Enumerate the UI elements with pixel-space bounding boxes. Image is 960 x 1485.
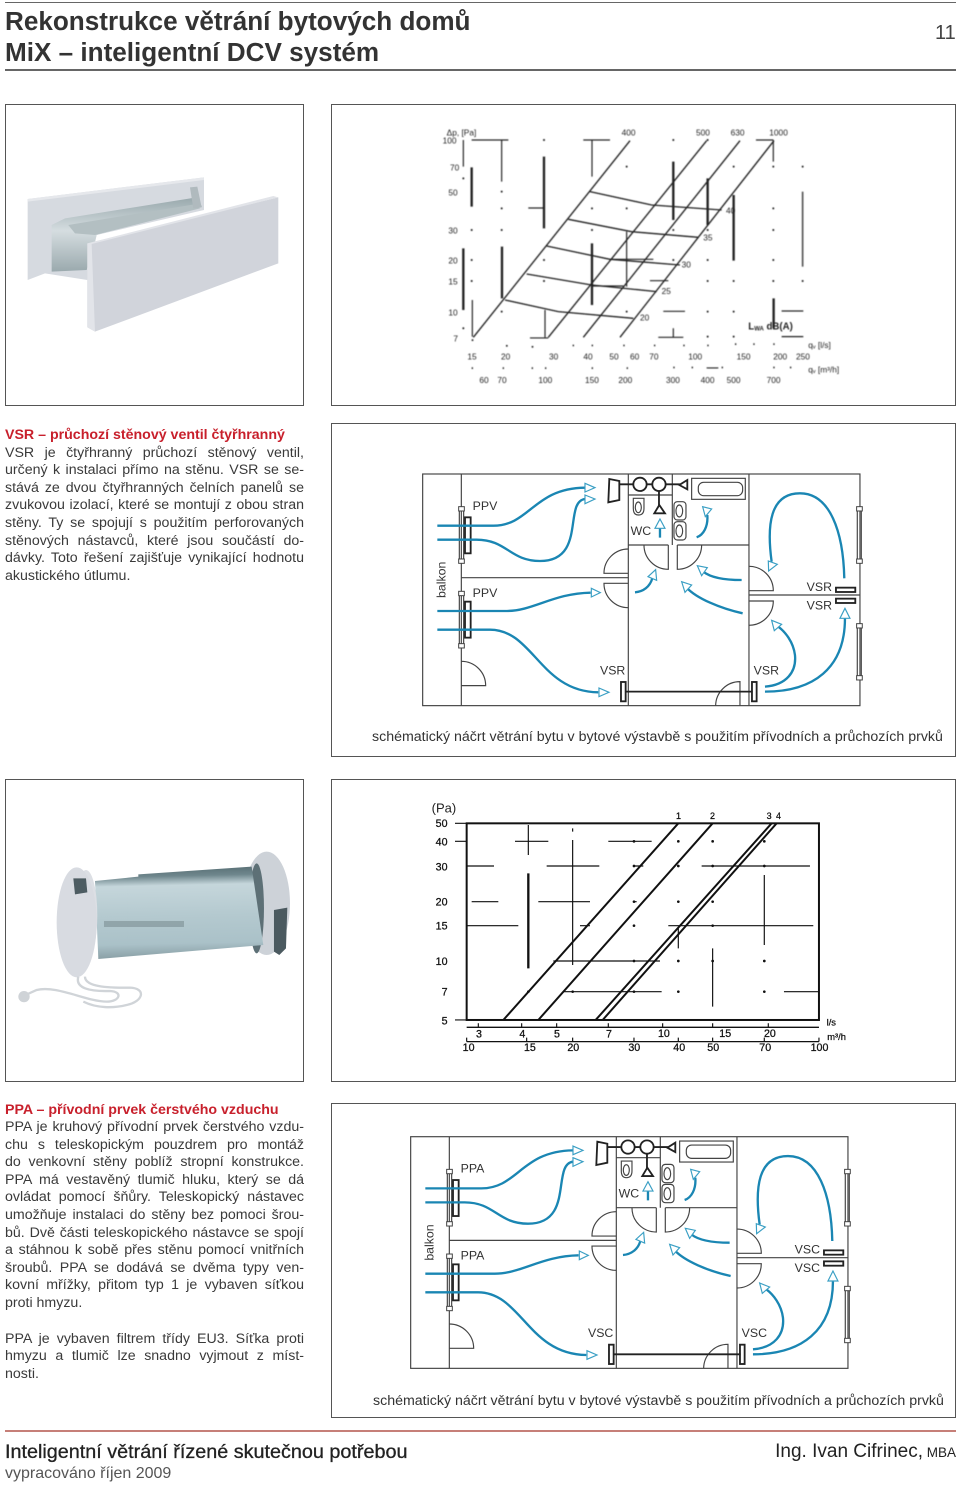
chart: VSR pressure and noise diagram: 30 — [448, 225, 458, 235]
chart: VSR pressure and noise diagram: 70 — [649, 352, 659, 362]
text block: PPA description: bů. Dvě části teleskopického nástavce se spojí — [5, 1225, 304, 1241]
chart: VSR pressure and noise diagram: Δp, [Pa] — [447, 127, 476, 137]
chart: PPA pressure loss diagram: 15 — [719, 1028, 731, 1040]
chart: PPA pressure loss diagram: 5 — [442, 1015, 448, 1027]
chart: PPA pressure loss diagram: 10 — [436, 956, 448, 968]
chart: VSR pressure and noise diagram: 15 — [448, 277, 458, 287]
chart: VSR pressure and noise diagram: 30 — [549, 352, 559, 362]
chart: VSR pressure and noise diagram: 150 — [737, 352, 751, 362]
chart: VSR pressure and noise diagram: 40 — [726, 205, 736, 215]
chart: VSR pressure and noise diagram: 700 — [767, 375, 781, 385]
caption: VSR schematic: schématický náčrt větrání bytu v bytové výstavbě s použitím přívodních a průchozích prvků — [372, 729, 943, 745]
chart: VSR pressure and noise diagram: L — [748, 321, 754, 332]
title — [5, 6, 470, 67]
chart: PPA pressure loss diagram: 20 — [764, 1028, 776, 1040]
panel: PPA pressure chart — [331, 779, 956, 1082]
chart: VSR pressure and noise diagram: 20 — [501, 352, 511, 362]
text block: PPA description: ovládat pomocí šňůry. Teleskopický nástavec — [5, 1189, 304, 1205]
text block: VSR description — [5, 427, 304, 584]
text block: PPA description: PPA má vestavěný tlumič hluku, který se dá — [5, 1172, 304, 1188]
diagram: apartment floor plan with PPV and VSR: PPV — [473, 499, 498, 513]
text block: VSR description: stává ze dvou čtyřhranných čelních panelů se — [5, 480, 304, 496]
chart: VSR pressure and noise diagram: 300 — [666, 375, 680, 385]
chart: VSR pressure and noise diagram: 40 — [583, 352, 593, 362]
chart: PPA pressure loss diagram: 7 — [606, 1029, 612, 1041]
text block: PPA filter note: PPA je vybaven filtrem třídy EU3. Síťka proti — [5, 1330, 304, 1346]
icon: PPA cylindrical inlet — [18, 851, 289, 1007]
chart: PPA pressure loss diagram: 40 — [673, 1042, 685, 1054]
chart: VSR pressure and noise diagram: 60 — [630, 352, 640, 362]
chart: PPA pressure loss diagram: 20 — [436, 896, 448, 908]
panel: VSR pressure chart — [331, 104, 956, 406]
chart: VSR pressure and noise diagram: 100 — [443, 136, 457, 146]
diagram: apartment floor plan with PPA and VSC: VSC — [795, 1261, 820, 1275]
chart: PPA pressure loss diagram: 3 — [476, 1029, 482, 1041]
chart: PPA pressure loss diagram: 10 — [658, 1028, 670, 1040]
footer author: Ing. Ivan Cifrinec, MBA — [775, 1441, 956, 1462]
chart: PPA pressure loss diagram: 30 — [436, 861, 448, 873]
diagram: apartment floor plan with PPA and VSC: PPA — [461, 1249, 485, 1263]
chart: PPA pressure loss diagram: 50 — [707, 1042, 719, 1054]
text block: PPA filter note: nosti. — [5, 1366, 39, 1382]
arrow: airflow paths — [437, 488, 845, 692]
panel: PPA ventilation schematic — [331, 1103, 956, 1418]
diagram: apartment floor plan with PPV and VSR: WC — [631, 524, 651, 538]
chart: PPA pressure loss diagram: 100 — [811, 1042, 828, 1054]
title: MiX – inteligentní DCV systém — [5, 37, 379, 67]
chart: VSR pressure and noise diagram: 500 — [727, 375, 741, 385]
text block: PPA description: proti hmyzu. — [5, 1295, 82, 1311]
chart: PPA pressure loss diagram: 4 — [776, 811, 781, 821]
footer date: vypracováno říjen 2009 — [5, 1465, 171, 1482]
panel: VSR ventilation schematic — [331, 423, 956, 757]
chart: VSR pressure and noise diagram: 400 — [622, 127, 636, 137]
chart: VSR pressure and noise diagram: 35 — [703, 233, 713, 243]
chart: PPA pressure loss diagram: 7 — [442, 987, 448, 999]
text block: VSR description: akustického útlumu. — [5, 568, 130, 584]
chart: VSR pressure and noise diagram: 100 — [688, 352, 703, 362]
panel: VSR product photo — [5, 104, 304, 406]
text block: VSR description: stěnových nástavců, které jsou součástí do- — [5, 533, 304, 549]
arrow: airflow paths — [425, 1150, 833, 1355]
diagram: apartment floor plan with PPV and VSR: PPV — [473, 586, 498, 600]
chart: PPA pressure loss diagram: 1 — [676, 811, 681, 821]
chart: VSR pressure and noise diagram: 7 — [453, 333, 458, 343]
chart: PPA pressure loss diagram: 15 — [524, 1042, 536, 1054]
text block: PPA description: chu s teleskopickým pouzdrem pro montáž — [5, 1137, 304, 1153]
text block: PPA description: do venkovní stěny poblíž stropní konstrukce. — [5, 1154, 304, 1170]
diagram: apartment floor plan with PPV and VSR: VSR — [807, 598, 832, 612]
diagram: apartment floor plan with PPA and VSC: VSC — [588, 1326, 613, 1340]
chart: PPA pressure loss diagram: 30 — [628, 1042, 640, 1054]
chart: VSR pressure and noise diagram: 400 — [701, 375, 715, 385]
chart: PPA pressure loss diagram: 40 — [436, 836, 448, 848]
chart: PPA pressure loss diagram: 5 — [554, 1029, 560, 1041]
caption: PPA schematic: schématický náčrt větrání bytu v bytové výstavbě s použitím přívodních a průchozích prvků — [373, 1393, 944, 1409]
footer rule — [5, 1430, 956, 1432]
chart: PPA pressure loss diagram: 2 — [710, 811, 715, 821]
chart: VSR pressure and noise diagram: 15 — [467, 352, 477, 362]
icon: VSR wall vent — [27, 177, 278, 331]
diagram: apartment floor plan with PPV and VSR: balkon — [434, 562, 448, 598]
panel: PPA product photo — [5, 779, 304, 1082]
chart: PPA pressure loss diagram: 15 — [436, 920, 448, 932]
page number: 11 — [935, 22, 956, 44]
text block: PPA description — [5, 1102, 304, 1311]
diagram: apartment floor plan with PPA and VSC: VSC — [742, 1326, 767, 1340]
chart: PPA pressure loss diagram: 3 — [767, 811, 772, 821]
chart: PPA pressure loss diagram: 10 — [463, 1042, 475, 1054]
text block: PPA description: umožňuje instalaci do stěny bez pomoci šrou- — [5, 1207, 304, 1223]
diagram: apartment floor plan with PPA and VSC: VSC — [795, 1243, 820, 1257]
footer title: Inteligentní větrání řízené skutečnou potřebou — [5, 1441, 407, 1463]
chart: VSR pressure and noise diagram: 50 — [609, 352, 619, 362]
text block: PPA filter note — [5, 1330, 304, 1382]
chart: VSR pressure and noise diagram: 70 — [497, 375, 507, 385]
text block: VSR description: dávky. Toto řešení zajišťuje vynikající hodnotu — [5, 550, 304, 566]
text block: PPA description: kovní mřížky, přitom typ 1 je vybaven síťkou — [5, 1277, 304, 1293]
diagram: apartment floor plan with PPV and VSR: VSR — [754, 663, 779, 677]
header rules — [5, 2, 956, 71]
chart: VSR pressure and noise diagram: 200 — [773, 352, 788, 362]
chart: VSR pressure and noise diagram: 20 — [448, 255, 458, 265]
chart: PPA pressure loss diagram: 20 — [567, 1042, 579, 1054]
text block: VSR description: VSR je čtyřhranný průchozí stěnový ventil, — [5, 445, 304, 461]
text block: VSR description: určený k instalaci přímo na stěnu. VSR se se- — [5, 462, 304, 478]
chart: PPA pressure loss diagram: l/s — [827, 1018, 836, 1028]
chart: VSR pressure and noise diagram: 50 — [448, 187, 458, 197]
chart: VSR pressure and noise diagram: 630 — [731, 127, 745, 137]
diagram: apartment floor plan with PPA and VSC: balkon — [422, 1224, 436, 1261]
chart: PPA pressure loss diagram: 70 — [759, 1042, 771, 1054]
text block: VSR description: stěny. Ty se spojují s použitím perforovaných — [5, 515, 304, 531]
diagram: apartment floor plan with PPV and VSR: VSR — [807, 580, 832, 594]
chart: VSR pressure and noise diagram: qᵥ [m³/h] — [808, 365, 839, 375]
diagram: apartment floor plan with PPA and VSC: WC — [619, 1187, 639, 1201]
chart: VSR pressure and noise diagram: 10 — [448, 307, 458, 317]
text block: PPA filter note: hmyzu a tlumič lze snadno vyjmout z míst- — [5, 1348, 304, 1364]
chart: VSR pressure and noise diagram: 100 — [538, 375, 553, 385]
chart: VSR pressure and noise diagram: 500 — [696, 127, 710, 137]
chart: PPA pressure loss diagram: (Pa) — [432, 800, 456, 815]
chart: VSR pressure and noise diagram: 250 — [796, 352, 810, 362]
title: Rekonstrukce větrání bytových domů — [5, 6, 470, 36]
text block: VSR description: zvukovou izolací, které se montují z obou stran — [5, 497, 304, 513]
chart: PPA pressure loss diagram: 4 — [519, 1029, 525, 1041]
text block: PPA description: PPA je kruhový přívodní prvek čerstvého vzdu- — [5, 1119, 304, 1135]
chart: PPA pressure loss diagram: 50 — [436, 818, 448, 830]
text block: PPA description: šroubů. PPA se dodává se dvěma typy ven- — [5, 1260, 304, 1276]
diagram: apartment floor plan with PPV and VSR: VSR — [600, 663, 625, 677]
chart: VSR pressure and noise diagram: 30 — [682, 259, 691, 269]
diagram: apartment floor plan with PPA and VSC: PPA — [461, 1162, 485, 1176]
chart: VSR pressure and noise diagram: dB(A) — [764, 321, 793, 332]
chart: VSR pressure and noise diagram: qᵥ [l/s] — [808, 340, 831, 350]
chart: VSR pressure and noise diagram: 1000 — [769, 127, 788, 137]
text block: PPA description: PPA – přívodní prvek čerstvého vzduchu — [5, 1102, 279, 1118]
chart: VSR pressure and noise diagram: WA — [754, 327, 765, 333]
chart: VSR pressure and noise diagram: 60 — [479, 375, 489, 385]
text block: VSR description: VSR – průchozí stěnový ventil čtyřhranný — [5, 427, 285, 443]
chart: VSR pressure and noise diagram: 70 — [450, 162, 460, 172]
chart: PPA pressure loss diagram: m³/h — [827, 1032, 846, 1042]
chart: VSR pressure and noise diagram: 150 — [585, 375, 599, 385]
text block: PPA description: a stáhnou k sobě přes stěnu pomocí vnitřních — [5, 1242, 304, 1258]
chart: VSR pressure and noise diagram: 25 — [662, 286, 671, 296]
chart: VSR pressure and noise diagram: 200 — [618, 375, 633, 385]
chart: VSR pressure and noise diagram: 20 — [640, 313, 650, 323]
